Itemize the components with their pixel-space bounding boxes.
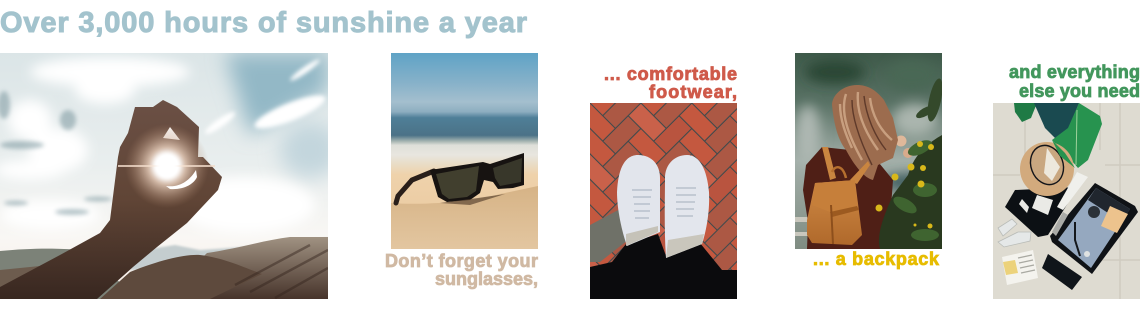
caption: everything else [1009,62,1140,101]
photo: white sneakers on brick paving [590,103,737,299]
trousers [590,234,737,299]
photo: sunglasses on the beach [391,53,538,249]
leaves [1014,103,1102,168]
caption: sunglasses: Don’t forget your [385,251,538,271]
photo: open suitcase flat lay [993,103,1140,299]
suitcase: right open half [1050,183,1138,274]
sand [391,186,538,249]
caption: sunglasses [385,251,538,289]
hand silhouette [0,100,222,299]
distant mountains [130,238,328,270]
sunglasses [396,153,524,205]
white shoes [998,219,1031,247]
straw hat [1020,141,1074,196]
caption: footwear: footwear, [649,82,737,102]
caption: sunglasses: sunglasses, [435,269,538,289]
caption: footwear: ... comfortable [604,64,737,84]
photo: woman with a backpack [795,53,942,249]
notebook [1002,250,1038,285]
foreground hills [0,249,130,299]
foliage and flowers [879,135,942,249]
leaf tip over hat [1052,140,1075,168]
caption: everything else: else you need [1019,81,1140,101]
right sneaker [665,155,709,258]
suitcase: left lid [1005,187,1078,237]
title: Over 3,000 hours of sunshine a year [0,7,527,39]
caption: backpack: ... a backpack [813,249,940,269]
caption: footwear [604,64,737,102]
left sneaker [617,155,660,246]
caption: everything else: and everything [1009,62,1140,82]
sun glare [125,124,209,208]
black wallet [1042,254,1082,290]
photo: hand holding the sun against the sky [0,53,328,299]
backpack [807,147,870,245]
dress [803,147,893,249]
hair [832,85,898,180]
